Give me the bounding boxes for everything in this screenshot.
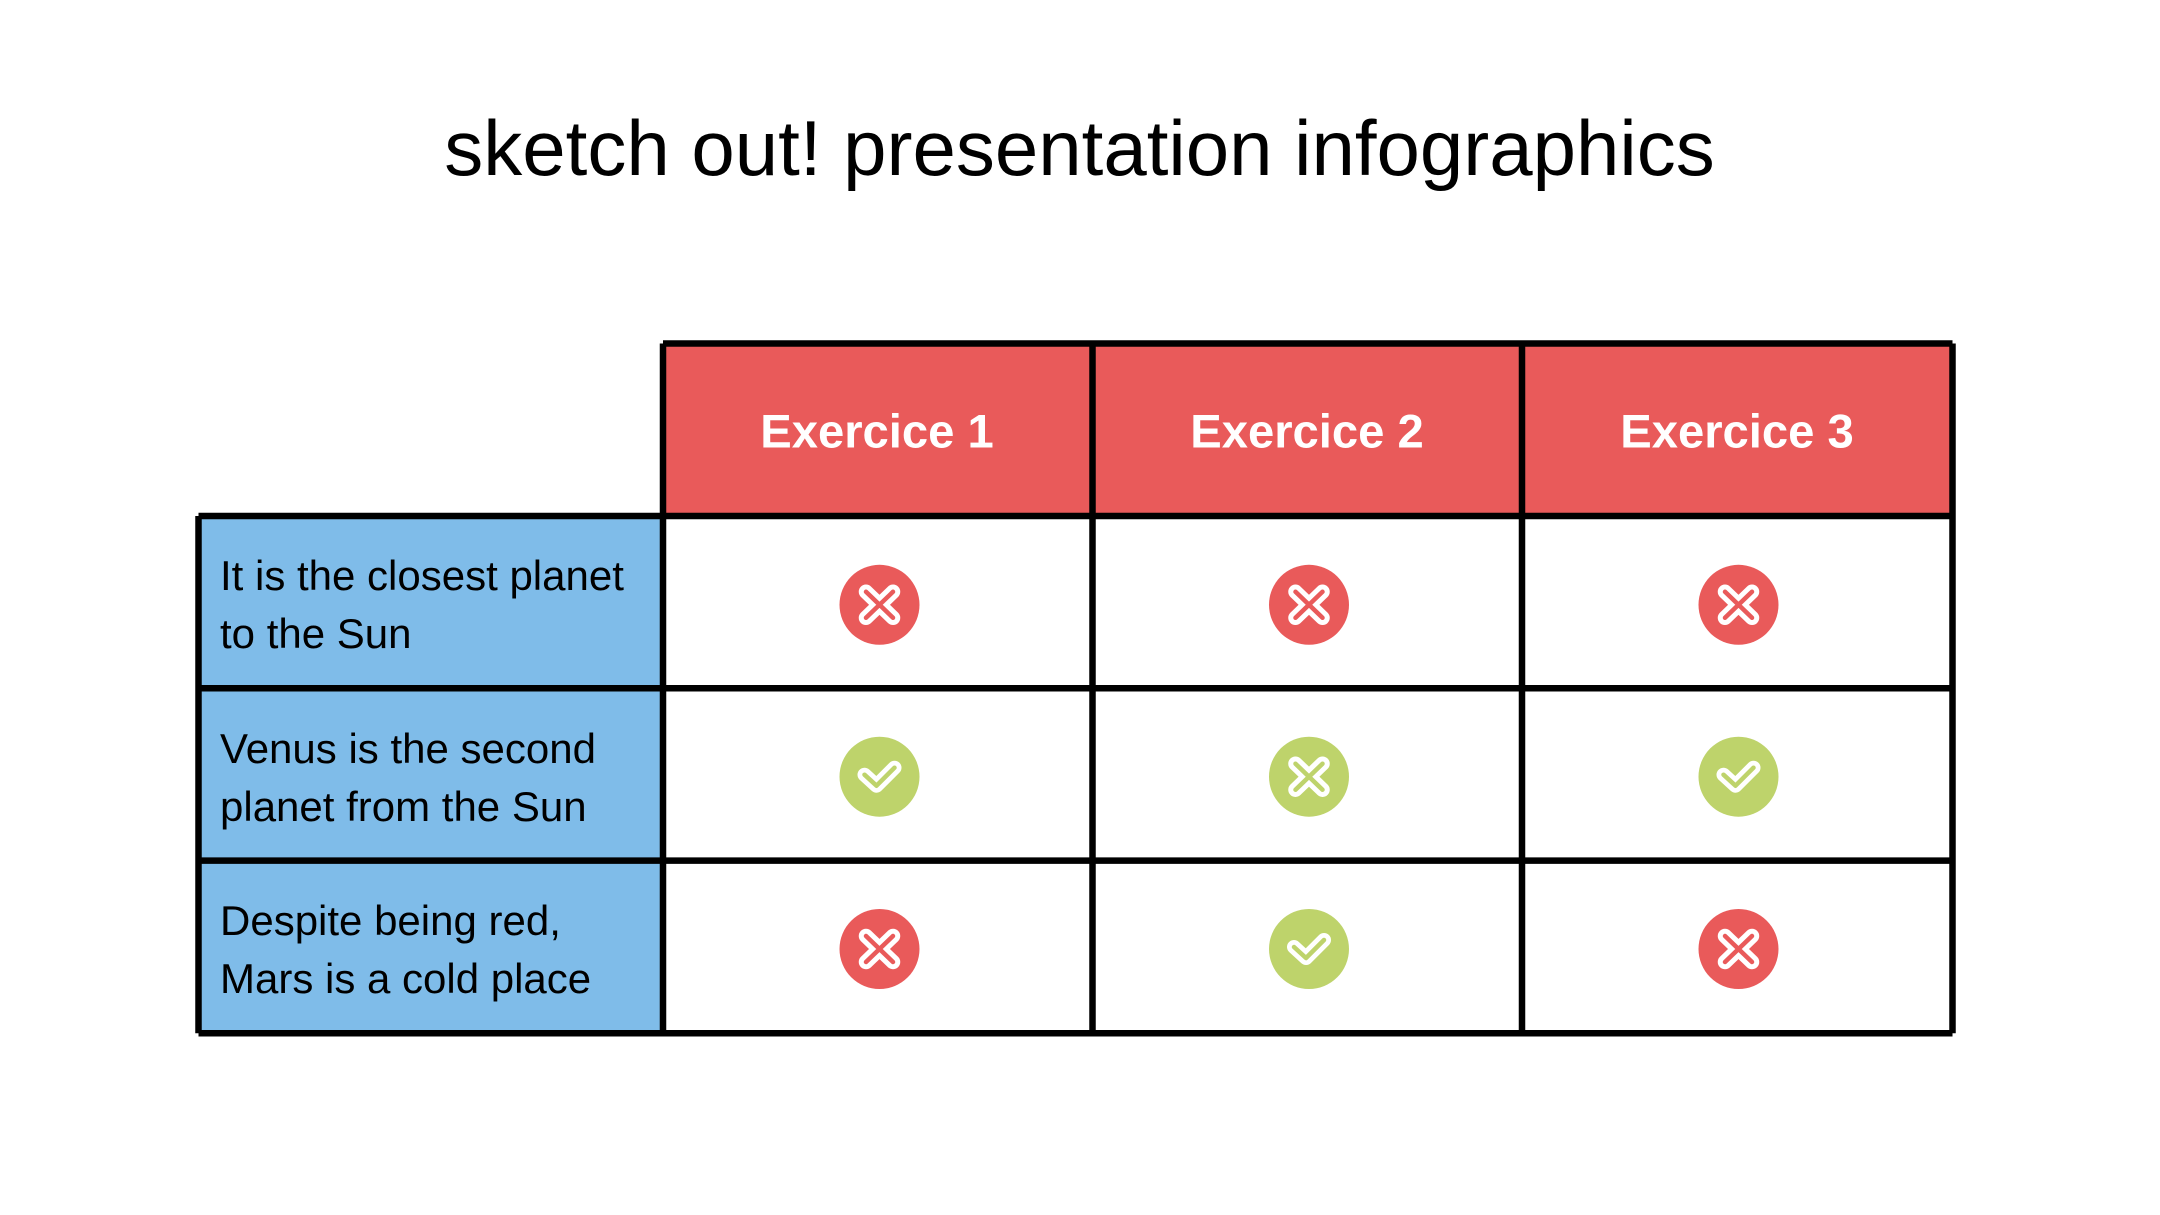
column headings: Exercice 2 xyxy=(1190,406,1424,458)
row label background xyxy=(198,516,663,1033)
column headings xyxy=(760,406,1854,458)
row labels xyxy=(220,552,624,1002)
icon: row 2 exercice 1 green check xyxy=(840,737,920,817)
icon: row 3 exercice 3 red cross xyxy=(1698,909,1778,989)
icon: row 2 exercice 3 green check xyxy=(1698,737,1778,817)
icon: row 3 exercice 2 green check xyxy=(1269,909,1349,989)
row labels: Mars is a cold place xyxy=(220,955,591,1002)
table grid lines xyxy=(198,344,1952,1033)
icon: row 1 exercice 1 red cross xyxy=(840,565,920,645)
icon: row 1 exercice 3 red cross xyxy=(1698,565,1778,645)
row labels: Venus is the second xyxy=(220,725,596,772)
panel: table xyxy=(198,344,1952,1033)
icon: row 1 exercice 2 red cross xyxy=(1269,565,1349,645)
title: sketch out! presentation infographics xyxy=(444,104,1715,192)
column headings: Exercice 1 xyxy=(760,406,994,458)
header row background xyxy=(663,344,1952,516)
row labels: Despite being red, xyxy=(220,897,561,944)
row labels: planet from the Sun xyxy=(220,783,587,830)
row labels: to the Sun xyxy=(220,610,411,657)
icon: row 2 exercice 2 green cross xyxy=(1269,737,1349,817)
row labels: It is the closest planet xyxy=(220,552,624,599)
icon: row 3 exercice 1 red cross xyxy=(840,909,920,989)
column headings: Exercice 3 xyxy=(1620,406,1854,458)
